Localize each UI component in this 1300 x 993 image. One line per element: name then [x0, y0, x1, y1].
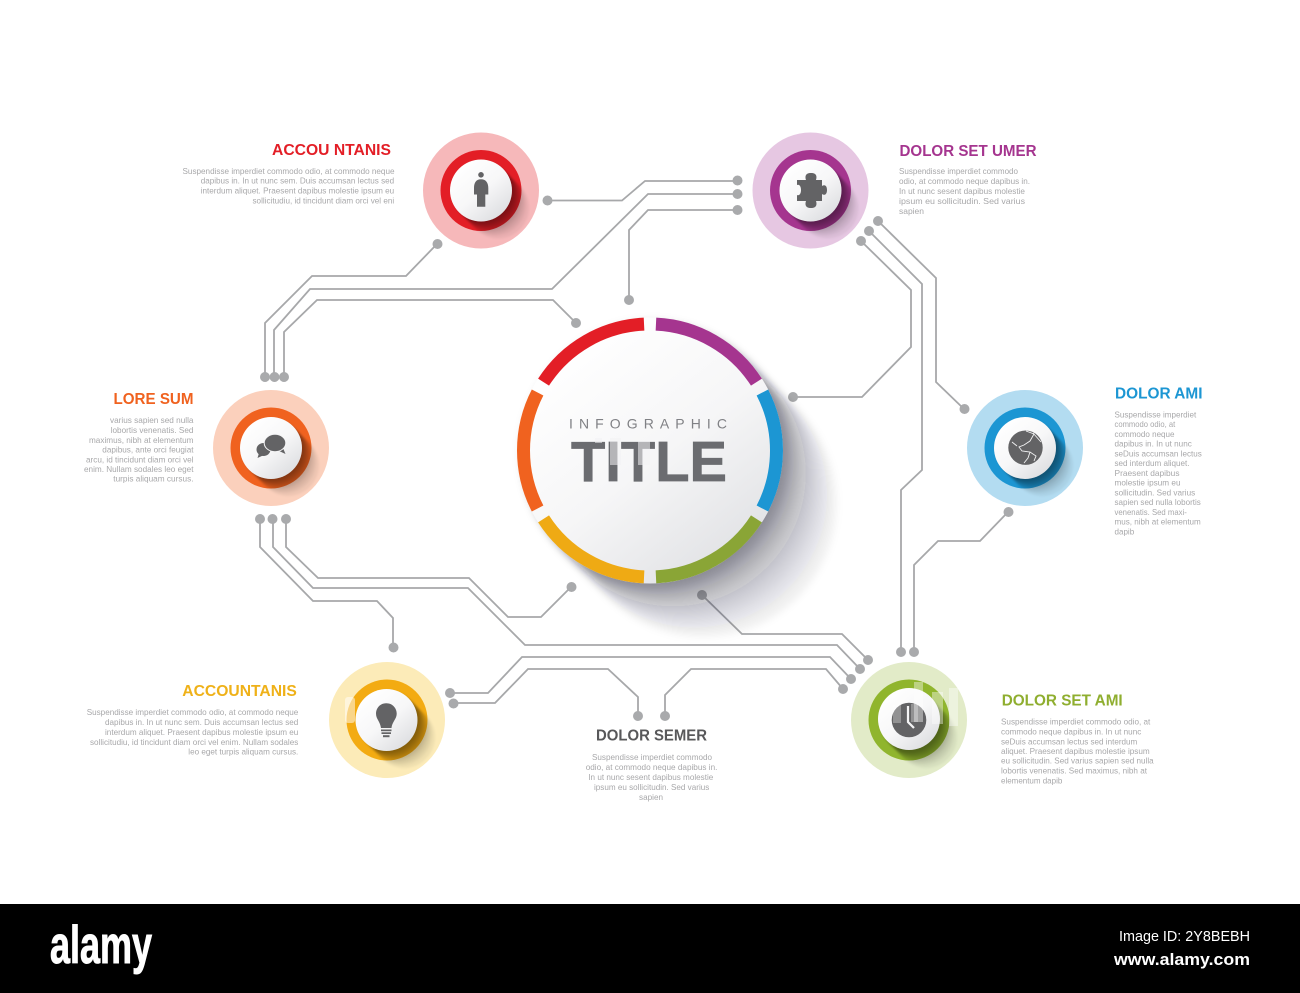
node: red: [423, 132, 539, 248]
body: venenatis. Sed maxi-: [1114, 507, 1187, 517]
heading: ACCOUNTANIS: [182, 683, 297, 700]
body: mus, nibh at elementum: [1114, 516, 1201, 526]
wire: red node to orange node: [260, 239, 442, 382]
body: turpis aliquam cursus.: [113, 474, 194, 484]
heading: DOLOR SET AMI: [1002, 692, 1123, 709]
footer logo: alamy: [50, 916, 152, 975]
body: interdum aliquet. Praesent dapibus molestie ipsum eu: [201, 186, 394, 196]
ring: [440, 150, 522, 231]
body: sapien: [639, 792, 663, 802]
body: enim. Nullam sodales leo eget: [84, 464, 194, 474]
body: aliquet. Praesent dapibus molestie ipsum: [1001, 746, 1150, 756]
wire: dolor semer to green node: [660, 669, 848, 721]
ring: [346, 680, 428, 760]
halo: [851, 662, 967, 778]
body: sed interdum aliquet.: [1114, 458, 1190, 468]
ball: [994, 417, 1056, 479]
halo: [752, 132, 868, 248]
heading: LORE SUM: [114, 391, 194, 408]
title: infographic: INFOGRAPHIC: [569, 416, 727, 432]
text block: dolor set umer: [899, 143, 1037, 216]
body: [84, 415, 194, 484]
body: elementum dapib: [1001, 775, 1062, 785]
body: dapibus in. In ut nunc sem. Duis accumsan lectus sed: [105, 717, 298, 727]
wire: orange node to center: [281, 514, 576, 617]
body: [899, 166, 1030, 216]
ring: [984, 408, 1066, 488]
text block: dolor ami: [1114, 385, 1202, 536]
watermark on halo: [345, 697, 355, 723]
ring: [770, 150, 851, 231]
body: In ut nunc sesent dapibus molestie: [899, 186, 1025, 196]
body: commodo neque: [1114, 429, 1175, 439]
ball shadow: [780, 160, 858, 238]
body: ipsum eu sollicitudin. Sed varius: [899, 196, 1025, 206]
body: Suspendisse imperdiet commodo: [899, 166, 1018, 176]
halo: [423, 132, 539, 248]
body: seDuis accumsan lectus sed interdum: [1001, 736, 1137, 746]
ring: [868, 680, 950, 760]
halo: [329, 662, 445, 778]
footer image id: Image ID: 2Y8BEBH: [1119, 928, 1250, 945]
body: varius sapien sed nulla: [110, 415, 194, 425]
body: odio, at commodo neque dapibus in.: [586, 762, 717, 772]
body: eu sollicitudin. Sed varius sapien sed nulla: [1001, 756, 1154, 766]
body: commodo odio, at: [1114, 419, 1176, 429]
icon: puzzle piece: [797, 173, 827, 208]
node: orange: [213, 390, 329, 506]
wire: red node to purple node: [542, 176, 742, 206]
body: ipsum eu sollicitudin. Sed varius: [594, 782, 709, 792]
wire: orange node to yellow node: [255, 514, 398, 652]
body: interdum aliquet. Praesent dapibus molestie ipsum eu: [105, 727, 298, 737]
halo: [213, 390, 329, 506]
node: yellow: [329, 662, 445, 778]
body: Suspendisse imperdiet commodo: [592, 752, 712, 762]
wire: center to orange node: [279, 300, 581, 382]
ball shadow: [451, 160, 529, 238]
body: dapibus, ante orci feugiat: [102, 445, 194, 455]
body: odio, at commodo neque dapibus in.: [899, 176, 1030, 186]
body: Suspendisse imperdiet: [1114, 409, 1197, 419]
heading: DOLOR AMI: [1115, 385, 1202, 402]
central circle: [517, 318, 836, 636]
body: sollicitudiu, id tincidunt diam orci vel eni: [252, 196, 394, 206]
text block: accou ntanis: [182, 142, 395, 206]
body: commodo neque dapibus in. In ut nunc: [1001, 726, 1142, 736]
ball shadow: [357, 690, 435, 768]
node: purple: [752, 132, 868, 248]
body: leo eget turpis aliquam cursus.: [188, 747, 298, 757]
ball: [240, 417, 302, 479]
body: [87, 707, 299, 757]
halo: [967, 390, 1083, 506]
body: Suspendisse imperdiet commodo odio, at: [1001, 717, 1151, 727]
body: [1114, 409, 1202, 536]
body: [1001, 717, 1154, 785]
heading: DOLOR SEMER: [596, 728, 707, 745]
body: dapibus in. In ut nunc: [1114, 438, 1192, 448]
segmented colour ring: [524, 324, 776, 577]
body: arcu, id tincidunt diam orci vel: [86, 454, 194, 464]
body: [586, 752, 717, 802]
body: sapien sed nulla lobortis: [1114, 497, 1201, 507]
ball: [450, 160, 512, 222]
long shadow: [519, 320, 836, 636]
footer bar: [0, 904, 1300, 993]
title: title: TITLE: [571, 430, 727, 494]
body: Praesent dapibus: [1114, 468, 1180, 478]
wire: center to green node: [697, 590, 873, 665]
body: dapibus in. In ut nunc sem. Duis accumsan lectus sed: [201, 176, 394, 186]
footer url: www.alamy.com: [1113, 950, 1250, 969]
wire: orange node to green node: [268, 514, 865, 674]
ball: [356, 689, 418, 751]
heading: ACCOU NTANIS: [272, 142, 391, 159]
heading: DOLOR SET UMER: [900, 143, 1037, 160]
wire: purple node to center: [624, 205, 742, 305]
text block: lore sum: [84, 391, 194, 484]
wire: purple node to green node: [864, 226, 922, 657]
icon: globe: [1008, 430, 1043, 465]
ball: [878, 688, 940, 750]
body: lobortis venenatis. Sed: [111, 425, 194, 435]
body: molestie ipsum eu: [1114, 478, 1181, 488]
icon: person: [474, 172, 488, 207]
icon: light bulb: [376, 703, 397, 737]
text block: dolor semer: [586, 728, 717, 802]
icon: clock: [892, 703, 926, 737]
body: sollicitudiu, id tincidunt diam orci vel enim. Nullam sodales: [90, 737, 298, 747]
wire: purple node to center right: [788, 236, 911, 402]
body: maximus, nibh at elementum: [89, 435, 194, 445]
body: Suspendisse imperdiet commodo odio, at commodo neque: [182, 166, 395, 176]
wire: blue node to green node: [909, 507, 1014, 657]
wire: yellow node to dolor semer: [448, 669, 643, 721]
body: [182, 166, 395, 206]
ball shadow: [241, 418, 319, 496]
wire: purple node to blue node: [873, 216, 970, 414]
connector lines: [255, 176, 1014, 721]
wire: purple node to orange node, middle: [270, 189, 742, 382]
white disc: [517, 318, 783, 584]
body: Suspendisse imperdiet commodo odio, at commodo neque: [87, 707, 299, 717]
node: blue: [967, 390, 1083, 506]
body: lobortis venenatis. Sed maximus, nibh at: [1001, 765, 1148, 775]
watermark over title: [595, 438, 650, 465]
body: In ut nunc sesent dapibus molestie: [588, 772, 713, 782]
ball: [780, 160, 842, 222]
ring: [230, 408, 312, 488]
ball shadow: [995, 418, 1073, 496]
text block: dolor set ami: [1001, 692, 1154, 785]
icon: speech bubbles: [256, 434, 286, 458]
body: seDuis accumsan lectus: [1114, 448, 1202, 458]
watermark on node: [914, 682, 958, 726]
node: green: [851, 662, 967, 778]
wire: yellow node to green node: [445, 657, 856, 698]
body: sapien: [899, 206, 924, 216]
text block: accountanis: [87, 683, 299, 757]
body: dapib: [1114, 526, 1134, 536]
ball shadow: [879, 690, 957, 768]
body: sollicitudin. Sed varius: [1114, 487, 1195, 497]
